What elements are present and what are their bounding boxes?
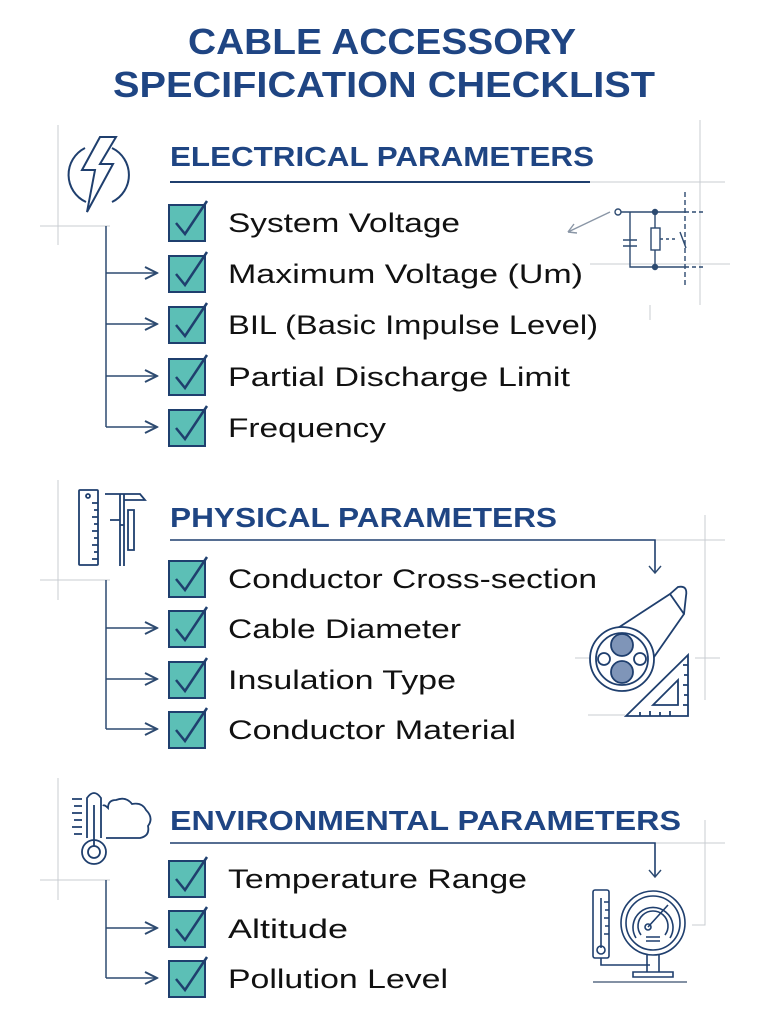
title <box>113 21 655 105</box>
checklist items <box>169 857 527 997</box>
icon: thermometer and cloud <box>72 793 151 864</box>
checklist items: Insulation Type <box>228 665 456 695</box>
checklist items <box>169 557 597 748</box>
icon: thermometer and pressure gauge <box>593 890 687 982</box>
checklist items: BIL (Basic Impulse Level) <box>228 310 598 340</box>
panel: environmental parameters <box>40 778 725 997</box>
tree connectors <box>106 226 157 427</box>
icon: circuit diagram <box>568 192 705 288</box>
checklist items: Conductor Material <box>228 715 516 745</box>
panel: electrical parameters <box>40 120 730 446</box>
checklist items: Maximum Voltage (Um) <box>228 259 583 289</box>
tree connectors <box>106 880 157 978</box>
heading: electrical: ELECTRICAL PARAMETERS <box>170 141 594 172</box>
heading: physical: PHYSICAL PARAMETERS <box>170 502 557 533</box>
checklist items: Altitude <box>228 914 348 944</box>
checklist items: Frequency <box>228 413 387 443</box>
title: SPECIFICATION CHECKLIST <box>113 64 655 105</box>
title: CABLE ACCESSORY <box>188 21 576 62</box>
icon: ruler and caliper <box>79 490 145 566</box>
icon: lightning <box>69 137 129 212</box>
heading: environmental: ENVIRONMENTAL PARAMETERS <box>170 805 681 836</box>
checklist items: Pollution Level <box>228 964 448 994</box>
checklist items: Temperature Range <box>228 864 527 894</box>
checklist items: System Voltage <box>228 208 460 238</box>
checklist items: Conductor Cross-section <box>228 564 597 594</box>
tree connectors <box>106 580 157 729</box>
checklist items <box>169 201 598 446</box>
panel: physical parameters <box>40 480 725 748</box>
checklist items: Partial Discharge Limit <box>228 362 571 392</box>
checklist items: Cable Diameter <box>228 614 461 644</box>
icon: cable and set square <box>590 587 688 716</box>
